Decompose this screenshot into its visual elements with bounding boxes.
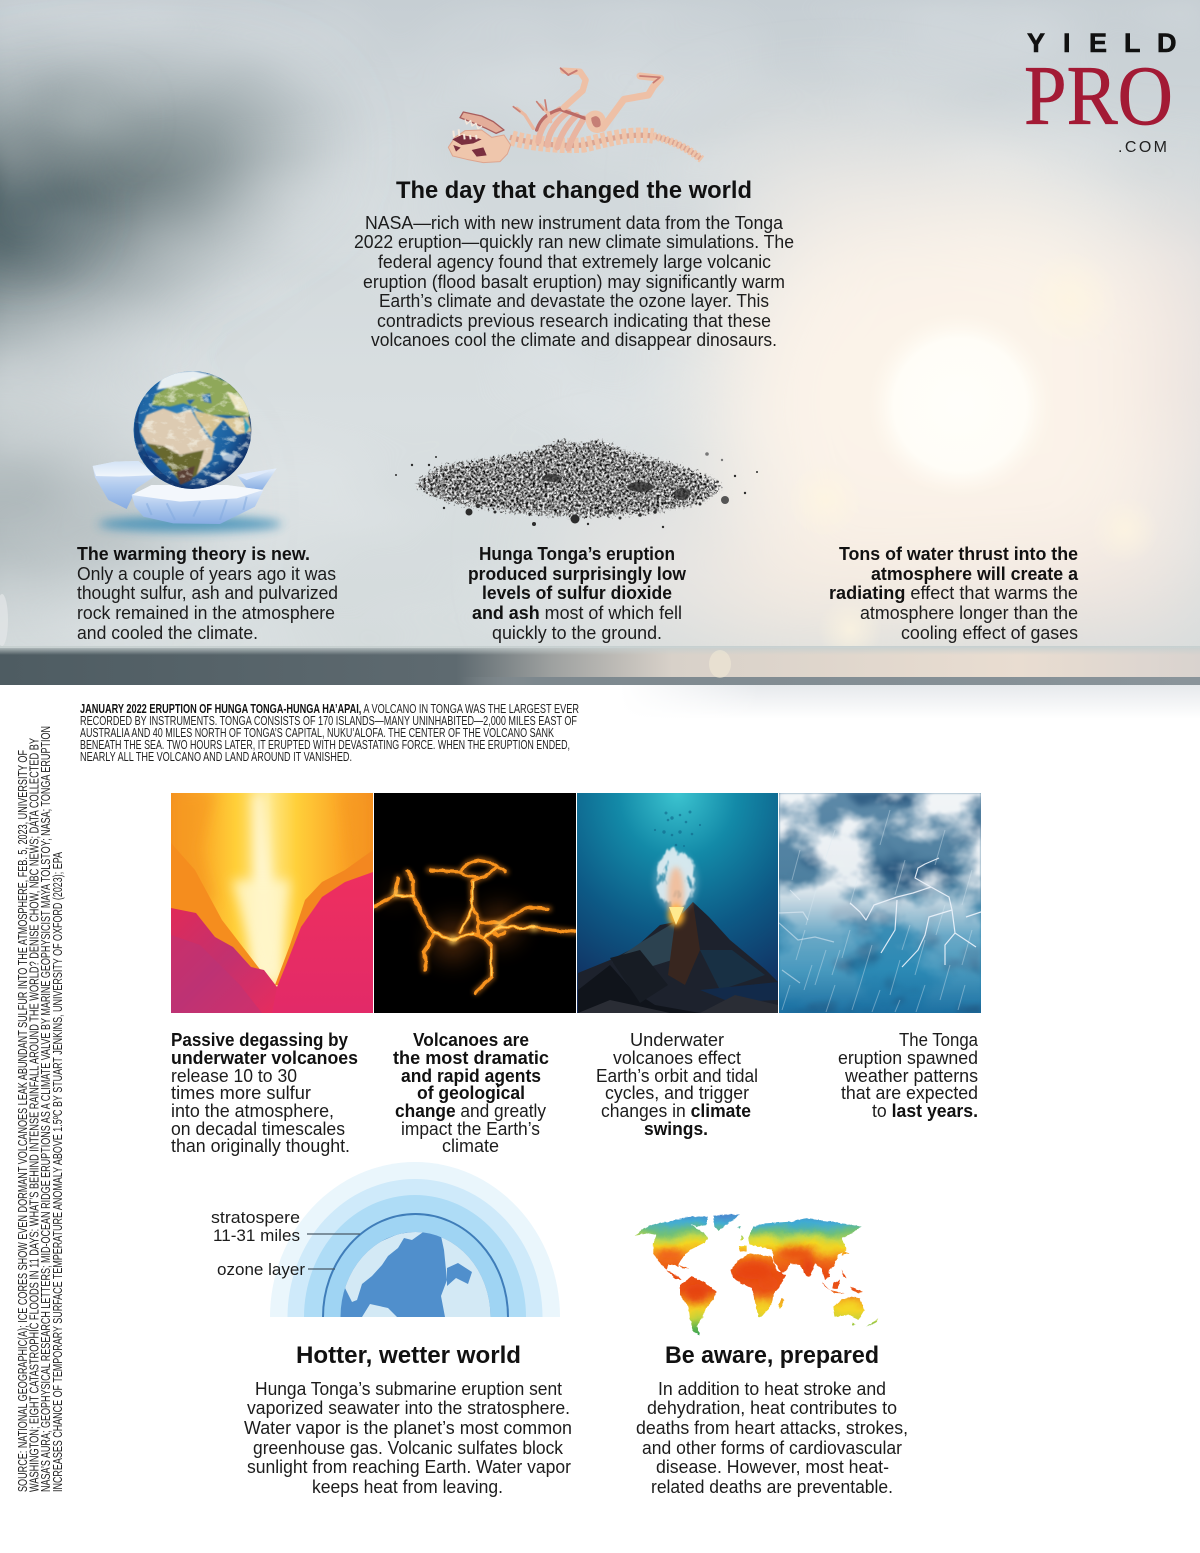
icon: earth on melting ice xyxy=(93,371,282,532)
text block: NASA intro: eruption (flood basalt eruption) may significantly warm xyxy=(363,272,785,292)
text block: NASA intro: Earth’s climate and devastate the ozone layer. This xyxy=(379,291,769,311)
text block: NASA intro: federal agency found that extremely large volcanic xyxy=(378,252,771,272)
caption: the Tonga eruption: to last years. xyxy=(872,1101,978,1121)
caption: underwater volcanoes: Earth’s orbit and tidal xyxy=(596,1066,758,1086)
text block: be aware prepared body: and other forms of cardiovascular xyxy=(642,1438,902,1458)
caption: volcanoes are dramatic: change and greatly xyxy=(395,1101,546,1121)
panel: underwater volcano xyxy=(577,793,778,1013)
title: The day that changed the world: The day that changed the world xyxy=(396,177,752,204)
text block: be aware prepared body: related deaths are preventable. xyxy=(651,1477,893,1497)
text block: January 2022 eruption note xyxy=(80,702,579,764)
text block: be aware prepared body: deaths from heart attacks, strokes, xyxy=(636,1418,908,1438)
caption: volcanoes are dramatic: and rapid agents xyxy=(401,1066,541,1086)
logo: Yield Pro .com xyxy=(1024,28,1176,156)
caption: passive degassing xyxy=(171,1030,358,1156)
source credit rotated text: INCREASES CHANCE OF TEMPORARY SURFACE TEMPERATURE ANOMALY ABOVE 1.5ºC BY STUART JENKINS, UNIVERSITY OF OXFORD (2023); EPA xyxy=(51,852,65,1492)
caption: underwater volcanoes xyxy=(596,1030,758,1139)
caption: underwater volcanoes: swings. xyxy=(644,1119,708,1139)
panel: passive degassing glow xyxy=(171,793,373,1013)
text block: NASA intro xyxy=(354,213,794,350)
caption: volcanoes are dramatic: Volcanoes are xyxy=(413,1030,529,1050)
text block: hotter wetter world body: Water vapor is the planet’s most common xyxy=(244,1418,572,1438)
text block: NASA intro: NASA—rich with new instrument data from the Tonga xyxy=(365,213,784,233)
text block: the warming theory is new xyxy=(77,544,338,643)
panel: storm clouds and lightning xyxy=(779,793,981,1013)
text block: Hunga Tonga's eruption: produced surprisingly low xyxy=(468,564,687,584)
text block: the warming theory is new: The warming theory is new. xyxy=(77,544,310,564)
heading: Be aware, prepared: Be aware, prepared xyxy=(665,1342,879,1369)
source credit rotated text xyxy=(16,726,65,1492)
text block: the warming theory is new: rock remained in the atmosphere xyxy=(77,603,335,623)
caption: underwater volcanoes: cycles, and trigger xyxy=(605,1083,749,1103)
caption: volcanoes are dramatic: impact the Earth’s xyxy=(401,1119,540,1139)
text block: Hunga Tonga's eruption: levels of sulfur dioxide xyxy=(482,583,672,603)
label: altitude: 11-31 miles xyxy=(213,1226,300,1245)
logo: Yield Pro .com: PRO xyxy=(1024,49,1173,143)
text block: hotter wetter world body: sunlight from reaching Earth. Water vapor xyxy=(247,1457,571,1477)
caption: volcanoes are dramatic xyxy=(393,1030,549,1156)
soft haze under the hero xyxy=(560,685,1200,719)
map: world temperature heat map xyxy=(634,1214,878,1336)
text block: tons of water: cooling effect of gases xyxy=(901,623,1078,643)
icon: pile of volcanic ash xyxy=(395,437,758,528)
label: stratosphere: stratospere xyxy=(211,1208,300,1227)
diagram: atmosphere layers over globe xyxy=(212,1162,560,1317)
caption: underwater volcanoes: Underwater xyxy=(630,1030,724,1050)
caption: passive degassing: release 10 to 30 xyxy=(171,1066,297,1086)
caption: passive degassing: Passive degassing by xyxy=(171,1030,348,1050)
label: ozone layer: ozone layer xyxy=(217,1260,305,1279)
text block: tons of water xyxy=(829,544,1079,643)
text block: hotter wetter world body xyxy=(244,1379,572,1497)
text block: January 2022 eruption note: BENEATH THE SEA. TWO HOURS LATER, IT ERUPTED WITH DEVASTATING FORCE. WHEN THE ERUPTION ENDED, xyxy=(80,738,570,752)
caption: the Tonga eruption: that are expected xyxy=(841,1083,978,1103)
source credit rotated text: SOURCE: NATIONAL GEOGRAPHIC(A); ICE CORES SHOW EVEN DORMANT VOLCANOES LEAK ABUNDANT SULFUR INTO THE ATMOSPHERE, FEB. 5, 2023, UNIVERSITY OF xyxy=(16,750,30,1492)
text block: the warming theory is new: Only a couple of years ago it was xyxy=(77,564,336,584)
hero background: cloudy sky and sea xyxy=(0,0,1200,685)
text block: Hunga Tonga's eruption: quickly to the ground. xyxy=(492,623,662,643)
text block: January 2022 eruption note: AUSTRALIA AND 40 MILES NORTH OF TONGA’S CAPITAL, NUKU’ALOFA. THE CENTER OF THE VOLCANO SANK xyxy=(80,726,554,740)
caption: passive degassing: than originally thought. xyxy=(171,1136,350,1156)
text block: NASA intro: contradicts previous research indicating that these xyxy=(377,311,771,331)
caption: passive degassing: on decadal timescales xyxy=(171,1119,345,1139)
text block: hotter wetter world body: greenhouse gas. Volcanic sulfates block xyxy=(253,1438,564,1458)
caption: passive degassing: times more sulfur xyxy=(171,1083,311,1103)
caption: volcanoes are dramatic: of geological xyxy=(417,1083,525,1103)
caption: the Tonga eruption xyxy=(838,1030,979,1121)
text block: the warming theory is new: and cooled the climate. xyxy=(77,623,258,643)
logo: Yield Pro .com: YIELD xyxy=(1027,28,1176,58)
heading: Hotter, wetter world: Hotter, wetter world xyxy=(296,1342,521,1369)
text block: January 2022 eruption note: JANUARY 2022 ERUPTION OF HUNGA TONGA-HUNGA HA’APAI, A VOLCANO IN TONGA WAS THE LARGEST EVER xyxy=(80,702,579,716)
text block: Hunga Tonga's eruption: Hunga Tonga’s eruption xyxy=(479,544,675,564)
text block: January 2022 eruption note: NEARLY ALL THE VOLCANO AND LAND AROUND IT VANISHED. xyxy=(80,750,352,764)
caption: the Tonga eruption: weather patterns xyxy=(844,1066,978,1086)
panel: lava cracks on black xyxy=(374,793,576,1013)
text block: be aware prepared body: disease. However, most heat- xyxy=(656,1457,889,1477)
text block: tons of water: Tons of water thrust into the xyxy=(839,544,1078,564)
text block: be aware prepared body xyxy=(636,1379,908,1497)
caption: the Tonga eruption: The Tonga xyxy=(899,1030,979,1050)
text block: the warming theory is new: thought sulfur, ash and pulvarized xyxy=(77,583,338,603)
text block: be aware prepared body: In addition to heat stroke and xyxy=(658,1379,886,1399)
caption: underwater volcanoes: volcanoes effect xyxy=(613,1048,741,1068)
caption: passive degassing: underwater volcanoes xyxy=(171,1048,358,1068)
text block: NASA intro: 2022 eruption—quickly ran new climate simulations. The xyxy=(354,232,794,252)
source credit rotated text: NASA’S AURA; GEOPHYSICAL RESEARCH LETTERS; MID-OCEAN RIDGE ERUPTIONS AS A CLIMATE VALVE BY MARINE GEOPHYSICIST MAYA TOLSTOY; NASA; TONGA ERUPTION xyxy=(39,726,53,1492)
source credit rotated text: WASHINGTON; EIGHT CATASTROPHIC FLOODS IN 11 DAYS: WHAT’S BEHIND INTENSE RAINFALL AROUND THE WORLD? DENISE CHOW, NBC NEWS; DATA COLLECTED BY xyxy=(28,738,42,1492)
logo: Yield Pro .com: .COM xyxy=(1118,139,1167,156)
text block: hotter wetter world body: vaporized seawater into the stratosphere. xyxy=(247,1398,570,1418)
text block: be aware prepared body: dehydration, heat contributes to xyxy=(647,1398,897,1418)
text block: Hunga Tonga's eruption xyxy=(468,544,687,643)
text block: January 2022 eruption note: RECORDED BY INSTRUMENTS. TONGA CONSISTS OF 170 ISLANDS—MANY UNINHABITED—2,000 MILES EAST OF xyxy=(80,714,577,728)
text block: NASA intro: volcanoes cool the climate and disappear dinosaurs. xyxy=(371,330,777,350)
icon: dinosaur skeleton xyxy=(448,68,702,163)
text block: hotter wetter world body: Hunga Tonga’s submarine eruption sent xyxy=(255,1379,562,1399)
text block: Hunga Tonga's eruption: and ash most of which fell xyxy=(472,603,682,623)
caption: volcanoes are dramatic: climate xyxy=(442,1136,499,1156)
caption: passive degassing: into the atmosphere, xyxy=(171,1101,334,1121)
text block: hotter wetter world body: keeps heat from leaving. xyxy=(312,1477,503,1497)
text block: tons of water: atmosphere longer than the xyxy=(860,603,1078,623)
caption: underwater volcanoes: changes in climate xyxy=(601,1101,751,1121)
caption: volcanoes are dramatic: the most dramatic xyxy=(393,1048,549,1068)
text block: tons of water: radiating effect that warms the xyxy=(829,583,1078,603)
caption: the Tonga eruption: eruption spawned xyxy=(838,1048,978,1068)
text block: tons of water: atmosphere will create a xyxy=(871,564,1079,584)
